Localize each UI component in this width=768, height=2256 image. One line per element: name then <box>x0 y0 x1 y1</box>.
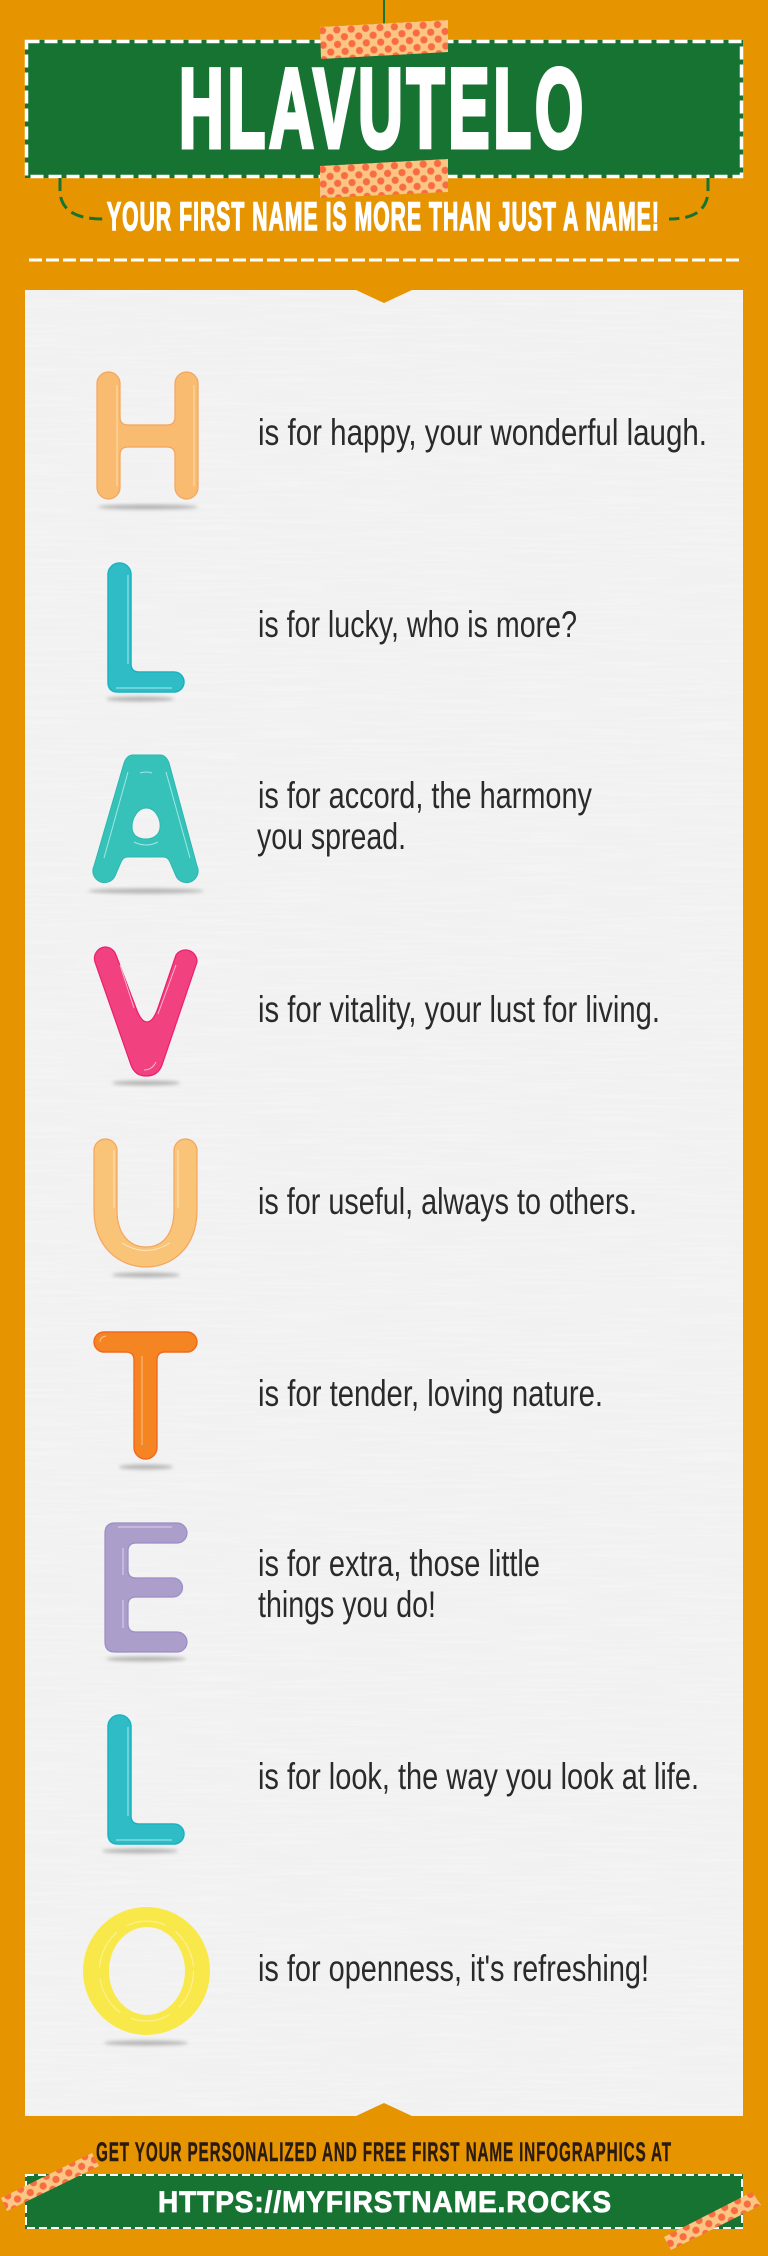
letter row U <box>94 1139 637 1278</box>
text: A <box>257 775 592 857</box>
icon: letter H <box>97 372 198 510</box>
text: L: is for lucky, who is more? <box>258 604 577 645</box>
icon: letter T <box>94 1332 197 1470</box>
header banner <box>25 0 743 198</box>
text: A: you spread. <box>257 816 406 857</box>
letter row V <box>94 947 660 1086</box>
icon: letter U <box>94 1139 197 1278</box>
icon: letter O <box>83 1907 210 2046</box>
text: O: is for openness, it's refreshing! <box>258 1948 649 1989</box>
icon: letter L <box>102 1715 184 1854</box>
icon: letter E <box>105 1523 187 1662</box>
text: A: is for accord, the harmony <box>258 775 592 816</box>
letter row E <box>105 1523 540 1662</box>
letter row H <box>97 372 707 510</box>
bottom tape <box>320 159 448 198</box>
right footer tape <box>664 2192 761 2250</box>
text: V: is for vitality, your lust for living. <box>258 989 660 1030</box>
letter row L <box>106 563 577 702</box>
panel: letters <box>25 290 743 2116</box>
icon: letter V <box>94 947 197 1086</box>
green title panel <box>25 40 743 178</box>
icon: letter A <box>88 755 204 894</box>
text: T: is for tender, loving nature. <box>258 1373 603 1414</box>
text: U: is for useful, always to others. <box>258 1181 637 1222</box>
text: E <box>258 1543 540 1625</box>
top tape <box>320 20 448 59</box>
text: E: is for extra, those little <box>258 1543 540 1584</box>
footer url: HTTPS://MYFIRSTNAME.ROCKS <box>158 2186 612 2219</box>
letter row A <box>88 755 592 894</box>
text: E: things you do! <box>258 1584 436 1625</box>
hanging thread <box>383 0 385 26</box>
letter row T <box>94 1332 603 1470</box>
letter row L2 <box>102 1715 699 1854</box>
subtitle with dashed brackets <box>60 178 708 239</box>
icon: letter L <box>106 563 184 702</box>
footer banner <box>25 2174 743 2229</box>
left footer tape <box>1 2153 99 2211</box>
letter row O <box>83 1907 649 2046</box>
